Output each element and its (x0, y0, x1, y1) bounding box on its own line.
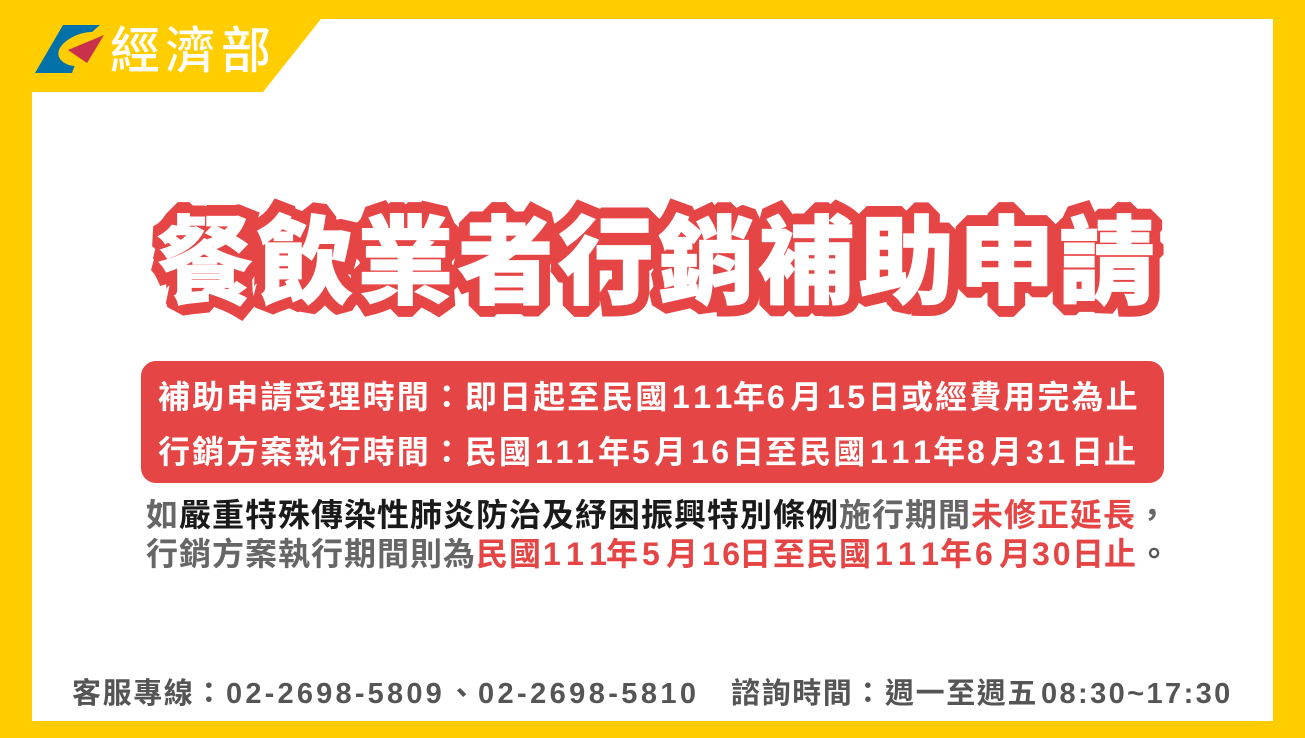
notice text: 16 (702, 536, 743, 572)
execution period: 111 (535, 434, 598, 470)
application period: 補助申請受理時間：即日起至民國 (158, 379, 670, 415)
execution period: 止 (1104, 434, 1138, 470)
notice text: 月 (666, 536, 699, 572)
title: 餐飲業者行銷補助申請 (157, 210, 1159, 317)
notice text: 止 (1104, 536, 1137, 572)
customer service line: 諮詢時間： (731, 677, 884, 710)
application period: 日 (868, 379, 902, 415)
execution period: 8 (967, 434, 987, 470)
customer service line: 02-2698-5810 (478, 678, 699, 710)
application period: 年 (733, 379, 767, 415)
application period: 月 (790, 379, 824, 415)
notice text: 至民國 (773, 536, 872, 572)
notice text: 日 (739, 536, 772, 572)
logo: ministry of economic affairs (35, 25, 104, 73)
execution period: 至民國 (765, 434, 867, 470)
execution period: 日 (732, 434, 766, 470)
application period: 15 (827, 379, 868, 415)
execution period: 日 (1071, 434, 1105, 470)
execution period: 16 (691, 434, 732, 470)
title: 餐飲業者行銷補助申請 (157, 210, 1159, 317)
notice text: 年 (606, 536, 639, 572)
application period: 111 (672, 379, 737, 415)
notice text: 5 (642, 536, 661, 572)
customer service line: 08:30~17:30 (1041, 678, 1233, 710)
panel: application dates (141, 361, 1164, 483)
notice text: 月 (999, 536, 1032, 572)
notice text: 30 (1032, 536, 1074, 572)
notice text: 行銷方案執行期間則為 (146, 536, 476, 572)
notice text: 6 (975, 536, 994, 572)
customer service line: 、 (447, 678, 478, 710)
execution period: 行銷方案執行時間：民國 (158, 434, 533, 470)
application period: 或經費用完為止 (901, 379, 1140, 415)
customer service line: 週一至週五 (885, 677, 1038, 710)
notice text: 年 (940, 536, 973, 572)
application period: 6 (767, 379, 787, 415)
execution period: 年 (933, 434, 967, 470)
execution period: 月 (654, 434, 688, 470)
notice text: 民國 (476, 536, 542, 572)
ministry name: 經濟部 (110, 23, 276, 79)
notice text: 111 (543, 536, 614, 572)
notice text: 。 (1138, 536, 1171, 572)
customer service line: 客服專線： (72, 677, 225, 710)
execution period: 31 (1026, 434, 1069, 470)
execution period: 111 (870, 434, 936, 470)
notice text (146, 497, 1171, 572)
customer service line: 02-2698-5809 (226, 678, 445, 710)
notice text: 日 (1072, 536, 1105, 572)
execution period: 年 (598, 434, 632, 470)
notice text: 111 (875, 536, 946, 572)
notice text: 如嚴重特殊傳染性肺炎防治及紓困振興特別條例施行期間未修正延長， (146, 497, 1169, 533)
execution period: 月 (990, 434, 1024, 470)
execution period: 5 (632, 434, 652, 470)
